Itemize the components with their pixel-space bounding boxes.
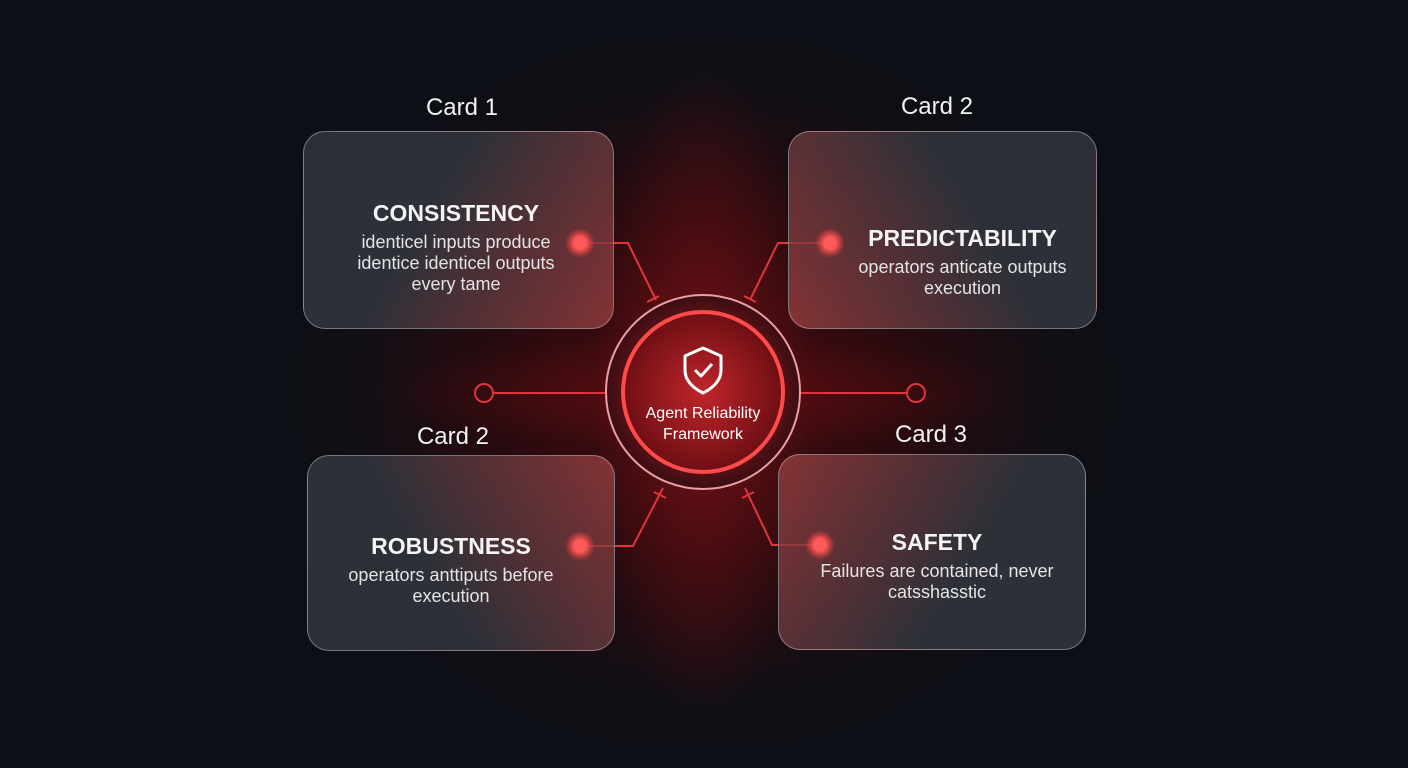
panel: consistency: [303, 131, 614, 329]
panel: predictability: execution: [924, 278, 1001, 298]
center hub: Agent Reliability: [646, 405, 760, 422]
panel: safety: SAFETY: [892, 529, 982, 555]
panel: safety: Failures are contained, never: [820, 561, 1054, 581]
panel: consistency: identice identicel outputs: [357, 253, 555, 273]
label: Card 2 top: Card 2: [901, 93, 973, 120]
panel: predictability: [788, 131, 1097, 329]
panel: consistency: every tame: [411, 274, 501, 294]
panel: robustness: [307, 455, 615, 651]
background glow band: [600, 0, 806, 768]
panel: robustness: operators anttiputs before: [348, 565, 554, 585]
panel: predictability: PREDICTABILITY: [868, 225, 1057, 251]
panel: consistency: CONSISTENCY: [373, 200, 539, 226]
panel: safety: catsshasstic: [888, 582, 986, 602]
label: Card 3: Card 3: [895, 421, 967, 448]
panel: safety: [778, 454, 1086, 650]
center hub: [605, 294, 801, 490]
label: Card 2 bottom: Card 2: [417, 423, 489, 450]
panel: robustness: ROBUSTNESS: [371, 533, 531, 559]
panel: predictability: operators anticate outputs: [858, 257, 1067, 277]
panel: consistency: identicel inputs produce: [361, 232, 551, 252]
icon: shield: [685, 348, 721, 393]
center hub: Framework: [663, 426, 744, 443]
label: Card 1: Card 1: [426, 94, 498, 121]
panel: robustness: execution: [412, 586, 490, 606]
